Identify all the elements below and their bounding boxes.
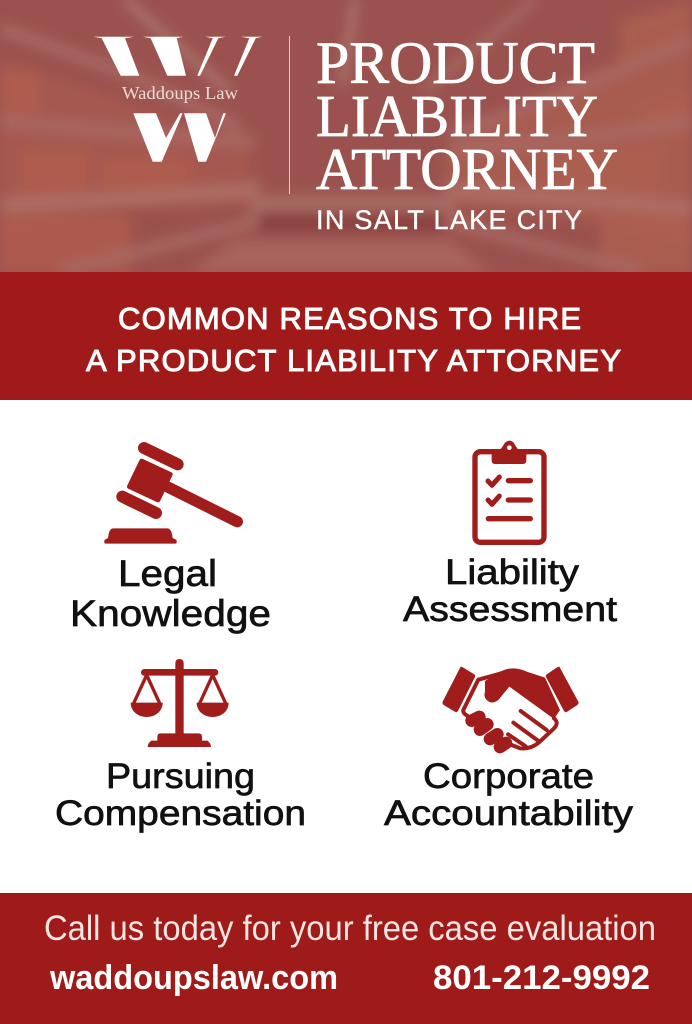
item: corporate accountability xyxy=(384,667,633,833)
title: ATTORNEY xyxy=(316,136,618,202)
icon: gavel xyxy=(105,448,237,543)
title xyxy=(316,30,618,202)
subtitle: IN SALT LAKE CITY xyxy=(316,205,582,235)
label: Accountability xyxy=(384,793,633,833)
label: Corporate xyxy=(423,756,594,796)
label: Compensation xyxy=(55,793,306,833)
label xyxy=(70,552,271,634)
logo lower W mark xyxy=(133,113,226,162)
item: legal knowledge xyxy=(70,448,271,634)
item: pursuing compensation xyxy=(55,659,306,833)
label xyxy=(384,756,633,833)
title: PRODUCT xyxy=(316,30,595,96)
item: liability assessment xyxy=(403,441,617,629)
white panel xyxy=(0,400,692,893)
header panel xyxy=(0,0,692,272)
label: Knowledge xyxy=(70,592,271,634)
logo wordmark: Waddoups Law xyxy=(122,83,238,103)
call to action: Call us today for your free case evaluation xyxy=(44,909,656,948)
footer xyxy=(0,893,692,1024)
phone number: 801-212-9992 xyxy=(433,959,650,997)
website: waddoupslaw.com xyxy=(49,959,338,997)
label: Assessment xyxy=(403,589,617,629)
label: Legal xyxy=(118,552,217,594)
icon: balance scales xyxy=(131,659,229,747)
title: LIABILITY xyxy=(316,83,598,149)
icon: clipboard checklist xyxy=(475,441,544,542)
logo: Waddoups Law xyxy=(93,37,262,162)
logo upper W mark xyxy=(93,37,262,76)
label: Pursuing xyxy=(106,756,255,796)
label xyxy=(55,756,306,833)
icon: handshake xyxy=(442,667,579,749)
background: blurred store aisle xyxy=(0,0,692,272)
red banner heading: COMMON REASONS TO HIRE xyxy=(118,301,581,336)
red banner heading xyxy=(0,272,692,400)
label xyxy=(403,552,617,629)
red banner heading: A PRODUCT LIABILITY ATTORNEY xyxy=(86,343,621,378)
divider line xyxy=(289,36,290,194)
label: Liability xyxy=(445,552,579,592)
